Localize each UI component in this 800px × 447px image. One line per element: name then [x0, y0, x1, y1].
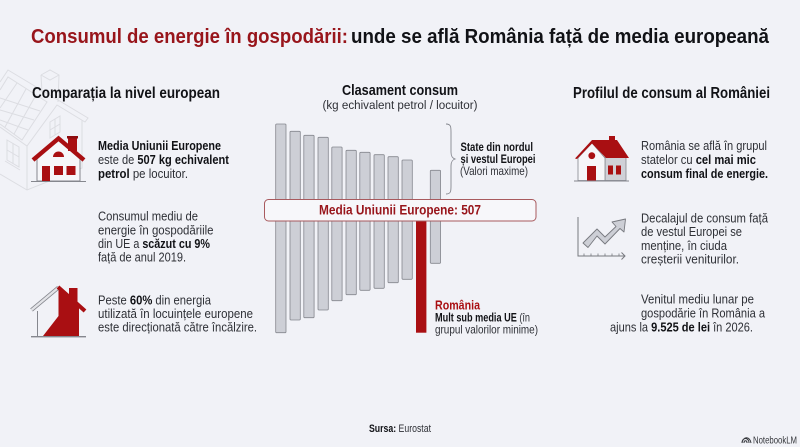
- text: lowest consumption: România se află în grupul: [641, 138, 767, 153]
- text: lowest consumption: consum final de energie.: [641, 166, 768, 181]
- background sketch: house with solar panels: [0, 70, 88, 190]
- text: average income: [610, 292, 766, 334]
- text: consumption gap: de vestul Europei se: [641, 224, 742, 239]
- text: EU average: este de 507 kg echivalent: [98, 152, 230, 167]
- label: Romania: România: [435, 298, 481, 312]
- label: northern and western states: și vestul Europei: [460, 152, 536, 166]
- label: northern and western states: (Valori maxime): [460, 164, 528, 178]
- text: 9% decrease: energie în gospodăriile: [98, 222, 214, 238]
- icon: rising chart: [578, 217, 626, 260]
- text: EU average: petrol pe locuitor.: [98, 166, 188, 181]
- icon: Romania house: [574, 136, 629, 182]
- text: 60% heating: Peste 60% din energia: [98, 292, 212, 308]
- heading: european comparison: Comparația la nivel european: [32, 85, 220, 102]
- text: EU average: Media Uniunii Europene: [98, 138, 221, 153]
- icon: half-red house: [31, 287, 86, 337]
- text: average income: Venitul mediu lunar pe: [641, 292, 754, 306]
- text: 9% decrease: față de anul 2019.: [98, 250, 186, 264]
- title: Consumul de energie în gospodării:: [31, 25, 348, 48]
- panel: Romania profile: [573, 85, 770, 334]
- text: average income: ajuns la 9.525 de lei în 2026.: [610, 320, 753, 334]
- panel: european comparison: [31, 85, 257, 337]
- brace: northern and western states: [446, 124, 455, 194]
- label: northern and western states: [460, 140, 536, 178]
- text: lowest consumption: statelor cu cel mai mic: [641, 152, 756, 167]
- text: 9% decrease: din UE a scăzut cu 9%: [98, 236, 211, 251]
- title: [31, 25, 770, 48]
- text: 9% decrease: Consumul mediu de: [98, 208, 198, 224]
- text: 60% heating: utilizată în locuințele europene: [98, 306, 253, 321]
- label: northern and western states: State din nordul: [460, 140, 533, 154]
- text: consumption gap: creșterii veniturilor.: [641, 252, 739, 266]
- subtitle: unit: (kg echivalent petrol / locuitor): [322, 98, 478, 112]
- source: Sursa: Eurostat: [369, 423, 431, 435]
- text: consumption gap: menține, în ciuda: [641, 238, 728, 253]
- heading: ranking: Clasament consum: [342, 82, 458, 99]
- text: consumption gap: Decalajul de consum față: [641, 210, 769, 226]
- label: Romania: Mult sub media UE (în: [435, 310, 530, 324]
- band: EU average: [264, 200, 536, 221]
- icon: red house: [31, 136, 86, 182]
- band: EU average: Media Uniunii Europene: 507: [319, 202, 481, 218]
- text: consumption gap: [641, 210, 769, 266]
- text: EU average: [98, 138, 230, 181]
- label: Romania: grupul valorilor minime): [435, 322, 538, 336]
- text: 9% decrease: [98, 208, 214, 264]
- text: 60% heating: este direcționată către încălzire.: [98, 320, 257, 334]
- text: average income: gospodărie în România a: [641, 306, 766, 320]
- bar chart: [276, 124, 441, 333]
- title: unde se află România față de media europeană: [351, 25, 770, 48]
- text: 60% heating: [98, 292, 257, 334]
- panel: consumption ranking: [264, 82, 538, 336]
- text: lowest consumption: [641, 138, 768, 181]
- label: Romania: [435, 298, 538, 336]
